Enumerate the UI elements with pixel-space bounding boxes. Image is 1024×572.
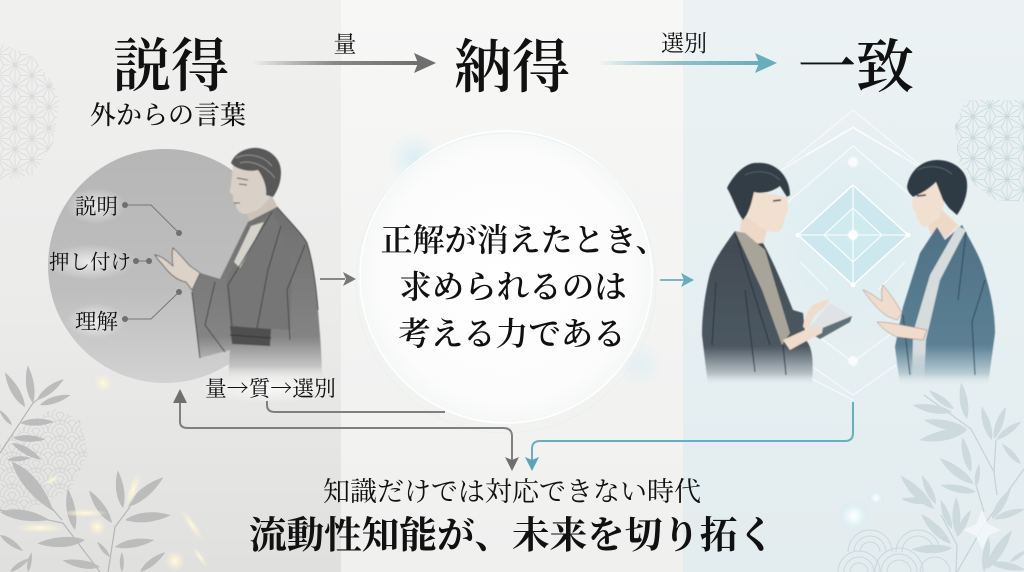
neck bbox=[246, 192, 278, 230]
facial features bbox=[234, 178, 248, 203]
centre glow accents bbox=[388, 132, 664, 389]
hand and forearm bbox=[155, 248, 200, 290]
bottom headline: 流動性知能が、未来を切り拓く bbox=[249, 515, 775, 557]
pattern: hemp leaf top left bbox=[0, 43, 60, 180]
label: 理解 with connector bbox=[66, 289, 182, 339]
bamboo leaves bottom left bbox=[0, 365, 171, 572]
feedback arrow: from pair to bottom bbox=[525, 402, 853, 471]
sparkles bottom right bbox=[838, 490, 1001, 550]
speech circle left bbox=[48, 149, 282, 383]
geometric crystal diagram bbox=[753, 110, 953, 400]
label: 量: 量 bbox=[334, 32, 356, 57]
feedback arrow: quality line bbox=[267, 401, 445, 412]
figure: young man in blue kimono bbox=[863, 160, 995, 385]
sparkles bottom left bbox=[16, 374, 209, 571]
label: 理解 with connector: 理解 bbox=[75, 310, 119, 334]
hair bbox=[727, 163, 790, 220]
face bbox=[912, 175, 948, 227]
label: 説明 with connector: 説明 bbox=[75, 195, 118, 219]
robe bbox=[702, 231, 813, 385]
arrow: man to centre bbox=[320, 272, 356, 286]
label: 選別: 選別 bbox=[661, 31, 707, 56]
hair bbox=[231, 148, 281, 197]
label: 説明 with connector bbox=[66, 188, 182, 236]
pattern: wave bottom left bbox=[0, 408, 88, 512]
kimono bbox=[192, 207, 322, 380]
label: 押し付け with connector bbox=[44, 244, 152, 280]
neck bbox=[928, 210, 958, 248]
figure: young man with tablet bbox=[702, 163, 852, 385]
arrow: 納得 to 一致 bbox=[597, 53, 777, 73]
title: 説得: 説得 bbox=[113, 34, 229, 99]
subtitle: 外からの言葉: 外からの言葉 bbox=[90, 101, 246, 130]
title: 一致: 一致 bbox=[798, 35, 914, 100]
pattern: hemp leaf top right bbox=[955, 100, 1024, 202]
figure: elder man in grey kimono bbox=[155, 148, 322, 380]
arrow: 説得 to 納得 bbox=[253, 53, 436, 73]
central message: 考える力である bbox=[398, 316, 626, 353]
face bbox=[748, 190, 788, 232]
pattern: wave bottom right bbox=[838, 530, 950, 572]
hands bbox=[803, 300, 830, 330]
label: 押し付け with connector: 押し付け bbox=[49, 251, 131, 274]
central circle bbox=[356, 131, 656, 433]
face bbox=[230, 156, 280, 214]
robe bbox=[895, 225, 995, 385]
hair bbox=[907, 160, 967, 215]
central message: 正解が消えたとき、 bbox=[381, 222, 667, 258]
label: 量→質→選別: 量→質→選別 bbox=[205, 372, 336, 403]
title: 納得: 納得 bbox=[454, 35, 570, 100]
bottom caption: 知識だけでは対応できない時代 bbox=[323, 477, 701, 507]
tablet bbox=[807, 303, 852, 337]
feedback arrow: back to left and down to bottom bbox=[173, 389, 519, 471]
arrow: centre to pair bbox=[660, 273, 694, 287]
neck bbox=[740, 215, 768, 252]
central message: 求められるのは bbox=[399, 269, 627, 306]
hands bbox=[863, 285, 902, 320]
bamboo leaves bottom right bbox=[897, 382, 1024, 572]
central message bbox=[381, 222, 667, 353]
